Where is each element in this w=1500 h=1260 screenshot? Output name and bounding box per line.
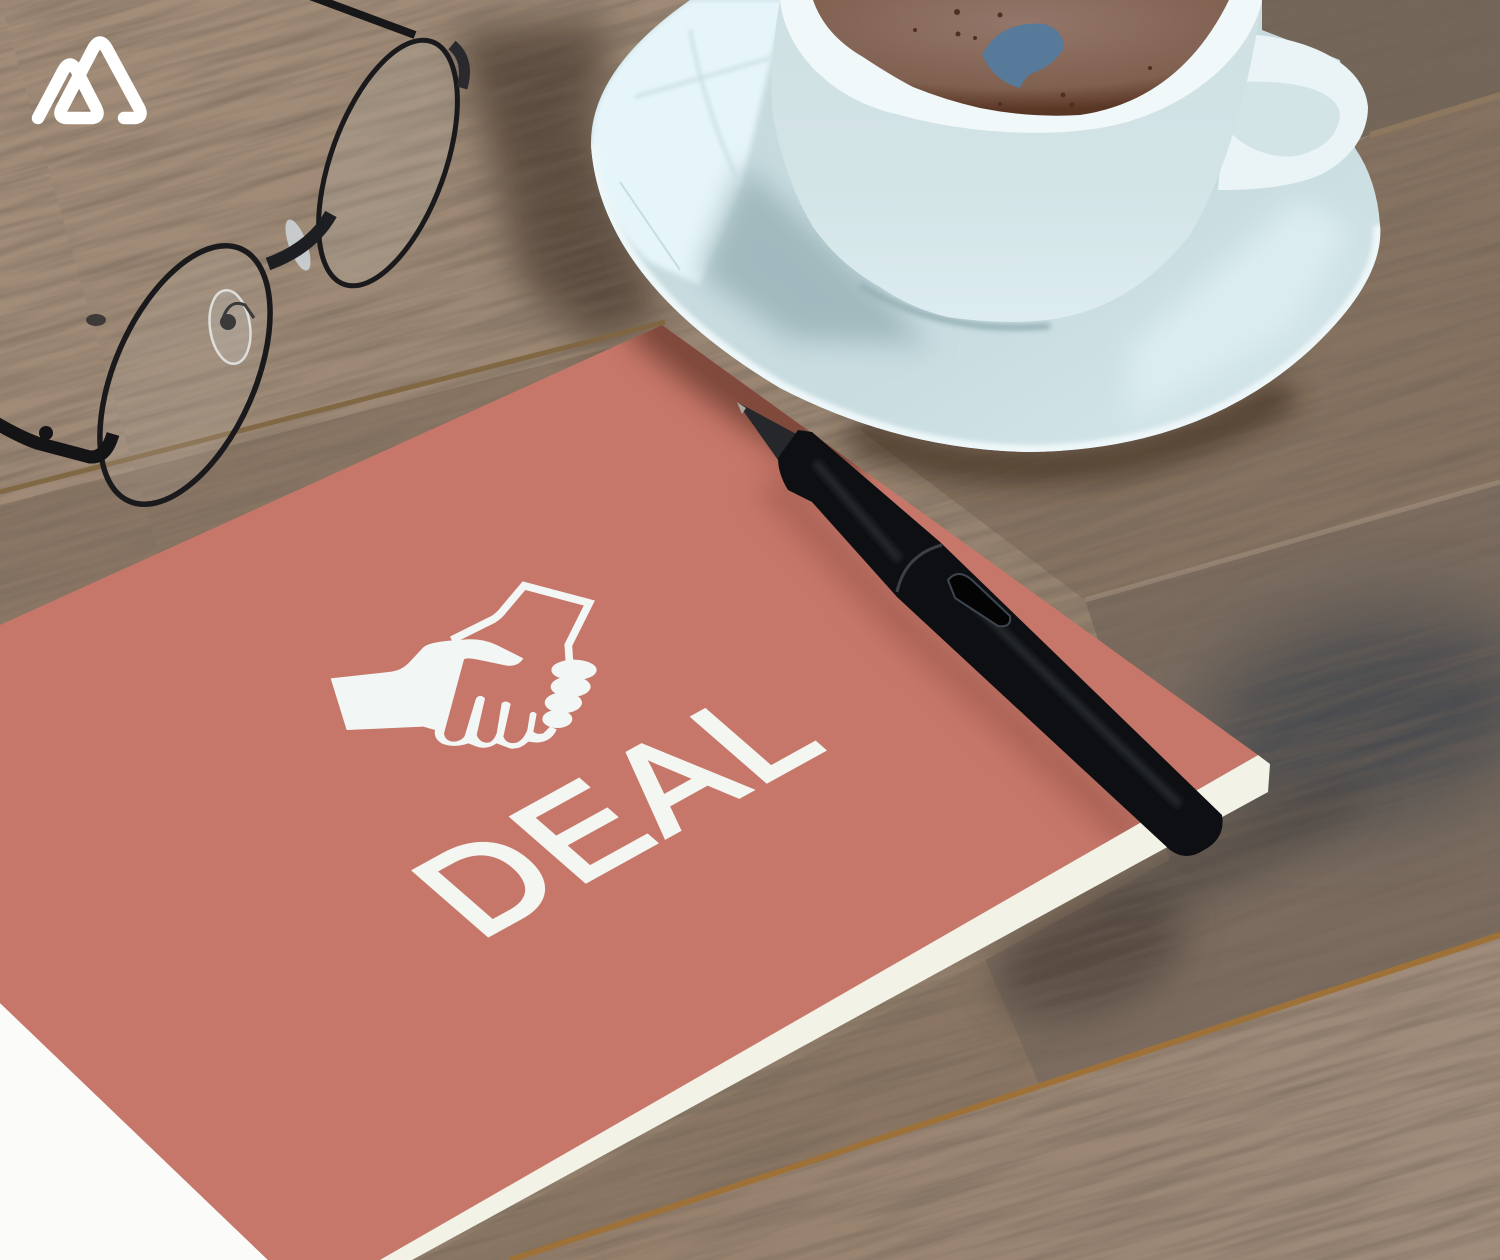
pen nib [737,402,800,460]
upper temple arm [310,0,415,35]
coffee [813,0,1229,116]
knot in the wood [86,314,106,326]
nose pad seen through left lens [205,288,255,366]
logo [38,42,141,118]
glasses [0,0,486,530]
icon: handshake [331,586,597,749]
coffee cup [772,0,1368,327]
coral cover [0,325,1258,1260]
shadows on the cover [640,310,1140,840]
weathered blue-grey patches [1178,581,1500,849]
heading: DEAL: DEAL [381,660,856,961]
plank: top right corner [1262,0,1500,138]
plank: right of the saucer [860,95,1500,600]
nose pad on the bridge [280,217,316,273]
plank: lower right board [688,938,1500,1260]
pen collar ring [897,545,942,592]
dark shadow between glasses and saucer [455,20,665,345]
notebook [0,310,1270,1260]
saucer rim [591,145,1380,452]
pen body [778,430,1223,856]
right lens [290,22,486,304]
pen clip slot [948,574,1010,626]
white page under cover [0,1003,268,1260]
saucer bright reflection [591,0,785,285]
bridge [268,214,331,264]
shadow cast by the saucer on the wood [850,390,1290,467]
coffee foam specks [913,9,1152,108]
saucer highlight on right [1133,208,1338,400]
saucer [591,0,1380,452]
cup handle [1218,34,1368,190]
plank: right weathered board [985,482,1500,1086]
cup rim [780,0,1262,133]
cup bottom contact shadow [860,285,1050,327]
cup body [772,0,1262,322]
coffee reflection [982,24,1063,88]
right hinge [452,45,464,88]
pen [737,402,1223,856]
saucer shadow beside cup [700,165,930,345]
saucer reflections [635,30,770,185]
cream page block edge [378,755,1270,1260]
plank seams [0,322,665,492]
cup hole tint [1232,82,1340,156]
pen barrel sheen [815,462,1180,805]
lower temple arm [0,423,113,457]
saucer base [591,0,1380,452]
left lens [65,220,305,530]
plank: board below notebook [424,1116,699,1260]
plank: left board below seam [0,348,612,625]
